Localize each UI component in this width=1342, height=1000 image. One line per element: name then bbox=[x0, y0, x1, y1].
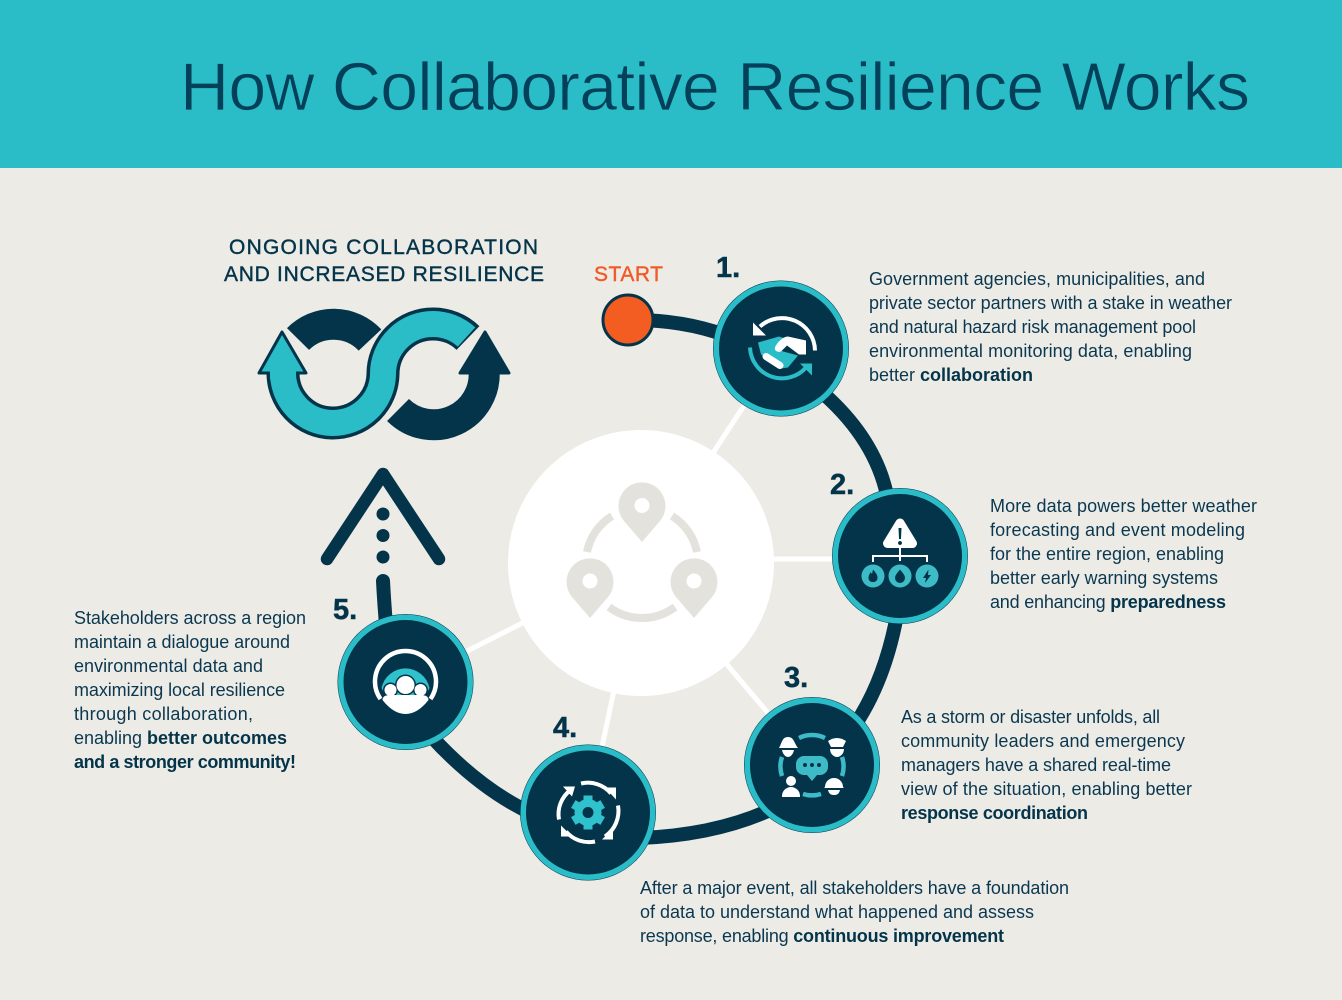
text block: step 2: for the entire region, enabling bbox=[990, 544, 1224, 564]
text block: step 4: of data to understand what happened and assess bbox=[640, 902, 1034, 922]
text block: step 4 bbox=[640, 878, 1069, 946]
text block: step 1: Government agencies, municipalities, and bbox=[869, 269, 1205, 289]
text block: step 1 bbox=[869, 269, 1232, 385]
text block: step 3: community leaders and emergency bbox=[901, 731, 1185, 751]
text block: step 4: After a major event, all stakeholders have a foundation bbox=[640, 878, 1069, 898]
title: How Collaborative Resilience Works bbox=[180, 49, 1250, 125]
start label: START bbox=[594, 263, 663, 286]
step 3 node: responders icon bbox=[744, 697, 880, 833]
text block: step 1: private sector partners with a stake in weather bbox=[869, 293, 1232, 313]
step numbers: 2. bbox=[830, 469, 854, 501]
text block: step 5: maintain a dialogue around bbox=[74, 632, 290, 652]
text block: step 2: better early warning systems bbox=[990, 568, 1218, 588]
text block: step 3: As a storm or disaster unfolds, all bbox=[901, 707, 1160, 727]
text block: step 1: better collaboration bbox=[869, 365, 1033, 385]
text block: step 5: through collaboration, bbox=[74, 704, 253, 724]
process track bbox=[383, 320, 897, 838]
icon: infinity arrows bbox=[259, 324, 509, 425]
text block: step 5: environmental data and bbox=[74, 656, 263, 676]
arrow: chevron and dots bbox=[327, 474, 439, 564]
text block: step 5 bbox=[74, 608, 306, 772]
central hub with location icon bbox=[508, 430, 774, 696]
text block: step 1: and natural hazard risk management pool bbox=[869, 317, 1196, 337]
step 2 node: warning icon bbox=[832, 488, 968, 624]
text block: step 2: and enhancing preparedness bbox=[990, 592, 1226, 612]
text block: step 2 bbox=[990, 496, 1257, 612]
text block: step 3: managers have a shared real-time bbox=[901, 755, 1171, 775]
heading: ongoing collaboration: AND INCREASED RESILIENCE bbox=[224, 263, 544, 286]
heading: ongoing collaboration bbox=[224, 236, 544, 286]
step numbers: 1. bbox=[716, 252, 740, 284]
text block: step 3: response coordination bbox=[901, 803, 1088, 823]
step 4 node: gear icon bbox=[520, 744, 656, 880]
text block: step 3 bbox=[901, 707, 1192, 823]
step 1 node: handshake icon bbox=[713, 280, 849, 416]
step 5 node: community icon bbox=[338, 614, 474, 750]
text block: step 4: response, enabling continuous improvement bbox=[640, 926, 1004, 946]
step numbers bbox=[333, 252, 854, 744]
text block: step 2: forecasting and event modeling bbox=[990, 520, 1245, 540]
step numbers: 4. bbox=[553, 712, 577, 744]
text block: step 5: maximizing local resilience bbox=[74, 680, 285, 700]
text block: step 3: view of the situation, enabling better bbox=[901, 779, 1192, 799]
text block: step 5: and a stronger community! bbox=[74, 752, 296, 772]
text block: step 5: enabling better outcomes bbox=[74, 728, 287, 748]
step numbers: 5. bbox=[333, 594, 357, 626]
text block: step 5: Stakeholders across a region bbox=[74, 608, 306, 628]
heading: ongoing collaboration: ONGOING COLLABORATION bbox=[229, 236, 538, 259]
step numbers: 3. bbox=[784, 662, 808, 694]
start marker bbox=[603, 295, 653, 345]
header band bbox=[0, 0, 1342, 168]
text block: step 2: More data powers better weather bbox=[990, 496, 1257, 516]
spokes bbox=[406, 349, 900, 813]
text block: step 1: environmental monitoring data, enabling bbox=[869, 341, 1192, 361]
